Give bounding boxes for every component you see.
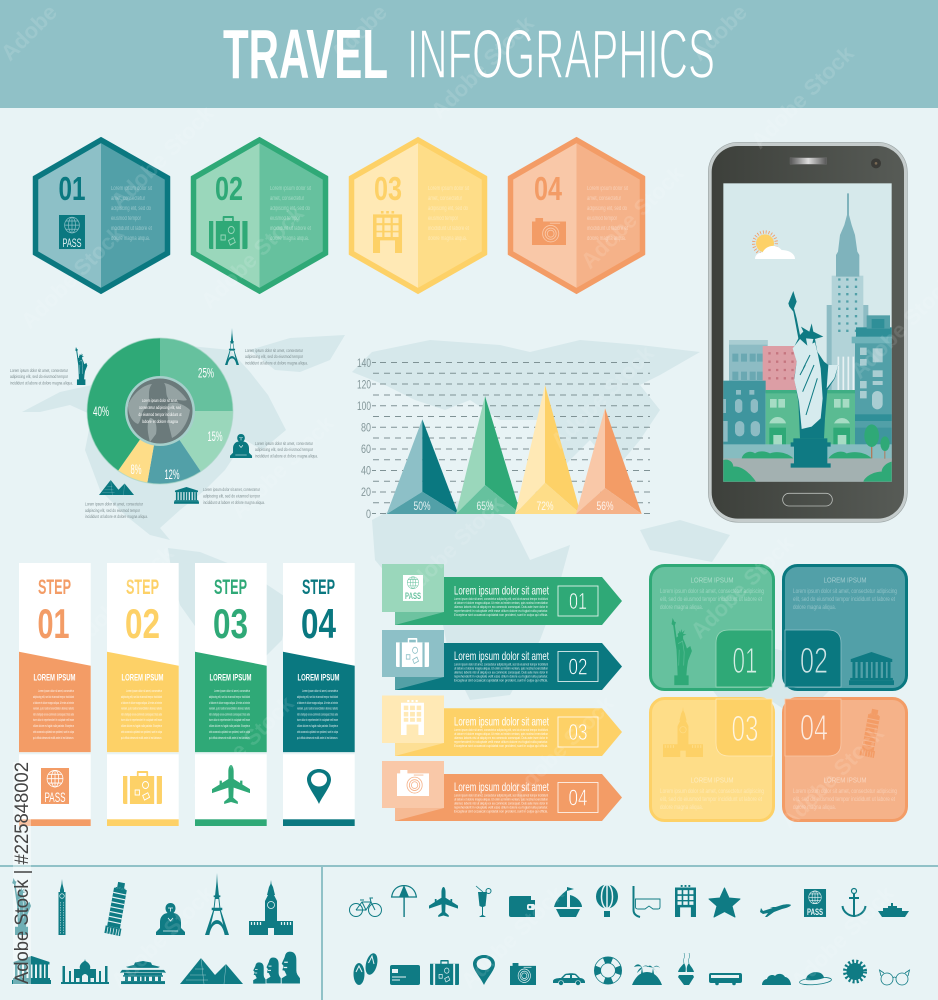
panel: hexagon 03: Lorem ipsum dolor sit <box>428 186 469 192</box>
panel: rounded square 04: LOREM IPSUM <box>824 776 866 784</box>
panel: rounded square 04: 04 <box>800 707 828 748</box>
panel: hexagon 04: amet, consectetur <box>587 196 621 202</box>
icon: bus <box>709 973 742 985</box>
watermark pattern: Adobe <box>686 0 752 66</box>
panel: hexagon 04: incididunt ut labore et <box>587 226 628 232</box>
panel: hexagon 01: Lorem ipsum dolor sit <box>111 186 152 192</box>
callout: pyramids: incididunt ut labore et dolore magna aliqua. <box>85 514 148 519</box>
panel: step 03: irure dolor in reprehenderit in voluptate velit esse <box>209 718 250 722</box>
panel: step 01: adipiscing elit, sed do eiusmod tempor incididunt <box>33 695 74 699</box>
panel: rounded square 01: dolore magna aliqua. <box>660 604 703 611</box>
callout: buddha: incididunt ut labore et dolore magna aliqua. <box>255 454 318 458</box>
panel: hexagon 01 <box>33 137 170 294</box>
icon: credit card <box>390 965 420 985</box>
panel: step 01: ut labore et dolore magna aliqua. Ut enim ad minim <box>33 701 74 705</box>
panel: hexagon 04: adipiscing elit, sed do <box>587 206 627 212</box>
icon: wallet <box>509 896 535 917</box>
axis labels: 60 <box>361 443 371 456</box>
panel: step 02: sint occaecat cupidatat non proident, sunt in culpa <box>121 730 162 734</box>
title light word: INFOGRAPHICS <box>407 15 715 93</box>
panel: arrow banner 01: Lorem ipsum dolor sit amet, consectetur adipiscing elit, sed do eiusmod tempor incididunt <box>454 597 548 601</box>
panel: arrow banner 03: Excepteur sint occaecat cupidatat non proident, sunt in culpa qui officia. <box>454 744 548 748</box>
panel: arrow banner 03: reprehenderit in voluptate velit esse cillum dolore eu fugiat nulla pariatur. <box>454 740 548 744</box>
panel: step 04: veniam, quis nostrud exercitation ullamco laboris <box>297 706 338 710</box>
panel: rounded square 03: elit, sed do eiusmod tempor incididunt ut labore et <box>660 796 762 803</box>
panel: step 01: Lorem ipsum dolor sit amet, consectetur <box>38 689 75 693</box>
panel: arrow banner 02 <box>382 630 622 690</box>
panel: rounded square 03: Lorem ipsum dolor sit amet, consectetur adipiscing <box>660 788 764 795</box>
sun and cloud <box>754 232 795 259</box>
axis labels: 80 <box>361 422 371 434</box>
globe: do eiusmod tempor incididunt ut <box>138 412 182 417</box>
panel: rounded square 03: 03 <box>732 708 758 749</box>
panel: step 01: LOREM IPSUM <box>34 672 76 684</box>
panel: arrow banner 04: ullamco laboris nisi ut aliquip ex ea commodo consequat. Duis aute irure dolor in <box>454 802 548 806</box>
watermark pattern: Adobe Stock <box>196 200 309 314</box>
phone screen illustration <box>723 183 892 482</box>
panel: step 04: ut labore et dolore magna aliqua. Ut enim ad minim <box>297 701 338 705</box>
panel: hexagon 02: incididunt ut labore et <box>270 226 311 232</box>
icon: bikini <box>678 953 694 985</box>
watermark pattern: Adobe Stock <box>426 10 539 124</box>
panel: hexagon 03: adipiscing elit, sed do <box>428 206 468 212</box>
panel: step 03: adipiscing elit, sed do eiusmod tempor incididunt <box>209 695 250 699</box>
world map <box>22 335 830 720</box>
chart: triangles <box>357 357 650 521</box>
watermark pattern: Adobe Stock <box>186 690 299 804</box>
watermark pattern: Adobe Stock <box>396 490 509 604</box>
panel: step 01: nisi ut aliquip ex ea commodo consequat. Duis aute <box>33 712 74 716</box>
icon: anchor <box>842 888 866 917</box>
panel: step 02: irure dolor in reprehenderit in voluptate velit esse <box>121 718 162 722</box>
callout: statue of liberty: incididunt ut labore et dolore magna aliqua. <box>10 380 73 386</box>
icon: bicycle <box>350 898 382 916</box>
panel: step 02: veniam, quis nostrud exercitation ullamco laboris <box>121 706 162 710</box>
panel: hexagon 02: dolore magna aliqua. <box>270 236 309 242</box>
globe: consectetur adipiscing elit, sed <box>139 405 181 410</box>
panel: step 04: irure dolor in reprehenderit in voluptate velit esse <box>297 718 338 722</box>
panel: step 04 <box>283 563 355 826</box>
icon: cloud <box>762 974 791 985</box>
panel: arrow banner 03: Lorem ipsum dolor sit amet <box>454 716 550 728</box>
title: TRAVEL <box>223 15 388 93</box>
panel: arrow banner 01: Excepteur sint occaecat cupidatat non proident, sunt in culpa qui officia. <box>454 613 548 617</box>
callout: eiffel tower <box>225 328 308 366</box>
panel: step 04: cillum dolore eu fugiat nulla pariatur. Excepteur <box>297 724 339 728</box>
panel: arrow banner 03: Lorem ipsum dolor sit amet, consectetur adipiscing elit, sed do eiusmod tempor incididunt <box>454 728 548 732</box>
panel: rounded square 01: LOREM IPSUM <box>690 576 734 584</box>
panel: arrow banner 02: Lorem ipsum dolor sit amet, consectetur adipiscing elit, sed do eiusmod tempor incididunt <box>454 662 548 666</box>
panel: step 03: qui officia deserunt mollit anim id est laborum. <box>209 736 250 740</box>
icon: starfish <box>709 888 740 917</box>
panel: step 03 <box>195 563 267 826</box>
panel: rounded square 03: LOREM IPSUM <box>690 776 734 784</box>
icon text: pass: PASS <box>807 907 823 917</box>
triangle 65% <box>456 396 521 514</box>
axis labels: 0 <box>366 508 371 521</box>
panel: step 04: adipiscing elit, sed do eiusmod tempor incididunt <box>297 695 338 699</box>
donut chart <box>87 338 233 484</box>
panel: rounded square 04 <box>784 698 906 820</box>
panel: arrow banner 02: reprehenderit in voluptate velit esse cillum dolore eu fugiat nulla pariatur. <box>454 674 548 678</box>
axis labels: 20 <box>361 486 371 499</box>
panel: hexagon 03: amet, consectetur <box>428 196 462 202</box>
panel: hexagon 03: dolore magna aliqua. <box>428 236 467 242</box>
icon: cocktail <box>476 886 491 917</box>
axis labels: 40 <box>361 464 371 478</box>
callout: pyramids: adipiscing elit, sed do eiusmod tempor <box>85 508 140 513</box>
watermark pattern: Adobe Stock <box>106 100 219 214</box>
icon: beach umbrella <box>392 885 416 917</box>
icon: snorkel <box>634 886 660 917</box>
phone <box>708 142 907 522</box>
watermark pattern: Adobe Stock <box>776 720 889 834</box>
panel: arrow banner 03 <box>382 696 622 756</box>
panel: step 04: Lorem ipsum dolor sit amet, consectetur <box>302 689 339 693</box>
panel: hexagon 02: amet, consectetur <box>270 196 304 202</box>
panel: hexagon 02: eiusmod tempor <box>270 216 300 222</box>
panel: step 02: Lorem ipsum dolor sit amet, consectetur <box>126 689 163 693</box>
panel: hexagon 04: eiusmod tempor <box>587 216 617 222</box>
panel: hexagon 01: 01 <box>58 170 86 207</box>
panel: hexagon 04: 04 <box>534 170 562 207</box>
panel: hexagon 04: Lorem ipsum dolor sit <box>587 186 628 192</box>
donut chart: 12% <box>164 467 180 482</box>
icon: sun <box>845 962 865 982</box>
panel: hexagon 01: amet, consectetur <box>111 196 145 202</box>
panel: rounded square 03: dolore magna aliqua. <box>660 804 703 811</box>
panel: arrow banner 04: ut labore et dolore magna aliqua. Ut enim ad minim veniam, quis nostrud exercitation <box>454 798 548 802</box>
globe: labore et dolore magna <box>142 419 178 424</box>
icon: life buoy <box>595 957 621 984</box>
watermark pattern: Adobe Stock <box>786 880 899 994</box>
watermark pattern: Adobe Stock <box>16 220 129 334</box>
panel: step 02: STEP <box>126 575 159 599</box>
donut chart: 25% <box>198 366 214 380</box>
panel: rounded square 02: 02 <box>800 640 828 681</box>
panel: rounded square 02: dolore magna aliqua. <box>793 604 836 611</box>
watermark pattern: Adobe Stock <box>106 880 219 994</box>
panel: arrow banner 02: Lorem ipsum dolor sit amet <box>454 650 550 663</box>
panel: rounded square 02: Lorem ipsum dolor sit amet, consectetur adipiscing <box>793 588 897 595</box>
panel: rounded square 02: elit, sed do eiusmod tempor incididunt ut labore et <box>793 596 895 603</box>
panel: step 01: sint occaecat cupidatat non proident, sunt in culpa <box>33 730 74 734</box>
panel: step 01: qui officia deserunt mollit anim id est laborum. <box>33 736 74 740</box>
panel: step 02: nisi ut aliquip ex ea commodo consequat. Duis aute <box>121 712 162 716</box>
panel: step 02: cillum dolore eu fugiat nulla pariatur. Excepteur <box>121 724 163 728</box>
statue of liberty <box>788 291 838 468</box>
icon: island <box>632 964 662 985</box>
panel: step 01: 01 <box>38 600 70 647</box>
panel: step 04: sint occaecat cupidatat non proident, sunt in culpa <box>297 730 338 734</box>
donut chart: 8% <box>130 462 142 477</box>
panel: hexagon 01: PASS <box>62 236 82 250</box>
icon: sunglasses <box>880 970 910 985</box>
panel: step 01: irure dolor in reprehenderit in voluptate velit esse <box>33 718 74 722</box>
watermark pattern: Adobe Stock <box>546 340 659 454</box>
panel: step 03: STEP <box>214 575 247 599</box>
panel: step 02 <box>107 563 179 826</box>
callout: buddha: adipiscing elit, sed do eiusmod tempor <box>255 447 313 452</box>
panel: step 04: qui officia deserunt mollit anim id est laborum. <box>297 736 338 740</box>
watermark pattern: Adobe Stock <box>576 160 689 274</box>
panel: step 02: LOREM IPSUM <box>122 672 164 684</box>
panel: step 04: 04 <box>301 600 336 647</box>
icon: ship <box>878 903 909 917</box>
watermark pattern: Adobe <box>326 0 392 66</box>
panel: arrow banner 01: ullamco laboris nisi ut aliquip ex ea commodo consequat. Duis aute irure dolor in <box>454 605 548 609</box>
callout: eiffel tower: incididunt ut labore et dolore magna aliqua. <box>245 360 308 366</box>
panel: arrow banner 01: reprehenderit in voluptate velit esse cillum dolore eu fugiat nulla pariatur. <box>454 609 548 613</box>
panel: hexagon 02: 02 <box>215 170 243 207</box>
ground and road <box>723 444 892 482</box>
panel: arrow banner 02: ut labore et dolore magna aliqua. Ut enim ad minim veniam, quis nostrud exercitation <box>454 666 548 670</box>
callout: eiffel tower: adipiscing elit, sed do eiusmod tempor <box>245 354 303 359</box>
panel: rounded square 01 <box>650 566 774 690</box>
icon: sun hat <box>799 972 832 986</box>
panel: arrow banner 04: Excepteur sint occaecat cupidatat non proident, sunt in culpa qui officia. <box>454 810 548 814</box>
icon: sailboat <box>554 887 582 917</box>
callout: buddha <box>230 434 318 458</box>
icon set: travel row 1 <box>350 884 909 917</box>
panel: step 03: cillum dolore eu fugiat nulla pariatur. Excepteur <box>209 724 251 728</box>
panel: hexagon 02: Lorem ipsum dolor sit <box>270 186 311 192</box>
panel: step 03: nisi ut aliquip ex ea commodo consequat. Duis aute <box>209 712 250 716</box>
callout: eiffel tower: Lorem ipsum dolor sit amet, consectetur <box>245 348 303 353</box>
panel: hexagon 01: adipiscing elit, sed do <box>111 206 151 212</box>
panel: hexagon 04: dolore magna aliqua. <box>587 236 626 242</box>
watermark pattern: Adobe Stock <box>746 40 859 154</box>
donut chart: 40% <box>93 404 109 419</box>
callout: pyramids <box>85 480 148 519</box>
panel: step 01: PASS <box>44 790 66 805</box>
panel: hexagon 01: dolore magna aliqua. <box>111 236 150 242</box>
triangle 65%: 65% <box>476 501 494 513</box>
panel: rounded square 03 <box>650 698 774 820</box>
triangle 50% <box>387 419 458 514</box>
panel: step 04: LOREM IPSUM <box>298 672 340 684</box>
callout: buddha: Lorem ipsum dolor sit amet, consectetur <box>255 441 313 446</box>
panel: rounded square 04: Lorem ipsum dolor sit amet, consectetur adipiscing <box>793 788 897 795</box>
panel: step 01: cillum dolore eu fugiat nulla pariatur. Excepteur <box>33 724 75 728</box>
axis labels: 140 <box>357 357 371 370</box>
watermark pattern: Adobe Stock <box>686 530 799 644</box>
left buildings <box>723 340 800 445</box>
icon: flip flops <box>354 952 379 985</box>
panel: step 03: 03 <box>213 600 248 647</box>
panel: hexagon 03: incididunt ut labore et <box>428 226 469 232</box>
panel: arrow banner 03: ut labore et dolore magna aliqua. Ut enim ad minim veniam, quis nostrud exercitation <box>454 732 548 736</box>
triangle 72%: 72% <box>536 501 554 513</box>
panel: hexagon 04 <box>508 137 645 294</box>
panel: hexagon 02: adipiscing elit, sed do <box>270 206 310 212</box>
triangle 56%: 56% <box>596 501 614 513</box>
axis labels: 120 <box>357 378 371 392</box>
icon set: landmarks <box>12 873 300 984</box>
panel: arrow banner 01: Lorem ipsum dolor sit amet <box>454 584 550 598</box>
header band <box>0 0 938 108</box>
callout: statue of liberty: adipiscing elit, sed do eiusmod tempor <box>10 374 68 379</box>
panel: rounded square 04: elit, sed do eiusmod tempor incididunt ut labore et <box>793 796 895 803</box>
triangle 56% <box>576 408 642 514</box>
panel: rounded square 01: Lorem ipsum dolor sit amet, consectetur adipiscing <box>660 588 764 595</box>
panel: hexagon 03 <box>349 137 487 294</box>
panel: step 02: adipiscing elit, sed do eiusmod tempor incididunt <box>121 695 162 699</box>
icon: airliner <box>760 904 791 917</box>
panel: arrow banner 02: Excepteur sint occaecat cupidatat non proident, sunt in culpa qui officia. <box>454 678 548 682</box>
panel: arrow banner 03: 03 <box>568 719 588 745</box>
panel: hexagon 03: 03 <box>374 170 402 207</box>
panel: step 01: STEP <box>38 575 71 599</box>
panel: step 02: 02 <box>125 600 160 647</box>
panel: arrow banner 01: PASS <box>405 591 421 601</box>
panel: hexagon 03: eiusmod tempor <box>428 216 458 222</box>
panel: arrow banner 02: 02 <box>568 654 588 680</box>
icon: hot air balloon <box>596 884 618 917</box>
trees <box>864 424 890 459</box>
callout: pyramids: Lorem ipsum dolor sit amet, consectetur <box>85 502 143 506</box>
panel: rounded square 04: dolore magna aliqua. <box>793 804 836 811</box>
panel: hexagon 02 <box>191 137 328 294</box>
right building <box>852 315 892 445</box>
panel: arrow banner 04: Lorem ipsum dolor sit amet, consectetur adipiscing elit, sed do eiusmod tempor incididunt <box>454 794 548 798</box>
panel: arrow banner 01: 01 <box>569 588 587 614</box>
panel: step 02: qui officia deserunt mollit anim id est laborum. <box>121 736 162 740</box>
panel: rounded square 02 <box>784 566 906 690</box>
panel: arrow banner 02: ullamco laboris nisi ut aliquip ex ea commodo consequat. Duis aute irure dolor in <box>454 670 548 674</box>
triangle 50%: 50% <box>414 501 430 513</box>
green buildings <box>766 390 855 445</box>
panel: step 03: sint occaecat cupidatat non proident, sunt in culpa <box>209 730 250 734</box>
panel: step 04: nisi ut aliquip ex ea commodo consequat. Duis aute <box>297 712 338 716</box>
panel: step 01: veniam, quis nostrud exercitation ullamco laboris <box>33 706 74 710</box>
globe <box>125 376 195 446</box>
panel: step 03: ut labore et dolore magna aliqua. Ut enim ad minim <box>209 701 250 705</box>
icon set: travel row 2 <box>354 952 910 986</box>
panel: arrow banner 01: ut labore et dolore magna aliqua. Ut enim ad minim veniam, quis nostrud exercitation <box>454 601 548 605</box>
panel: arrow banner 04 <box>382 761 622 821</box>
donut chart: 15% <box>208 429 222 444</box>
panel: arrow banner 03: ullamco laboris nisi ut aliquip ex ea commodo consequat. Duis aute irure dolor in <box>454 736 548 740</box>
panel: arrow banner 04: 04 <box>568 784 588 810</box>
callout: parthenon <box>174 487 265 505</box>
panel: step 03: veniam, quis nostrud exercitation ullamco laboris <box>209 706 250 710</box>
panel: hexagon 01: eiusmod tempor <box>111 216 141 222</box>
panel: step 03: Lorem ipsum dolor sit amet, consectetur <box>214 689 251 693</box>
panel: rounded square 01: elit, sed do eiusmod tempor incididunt ut labore et <box>660 596 762 603</box>
icon: car <box>553 973 585 986</box>
skyscraper <box>827 193 868 392</box>
panel: arrow banner 01 <box>382 564 622 625</box>
callout: parthenon: Lorem ipsum dolor sit amet, consectetur <box>203 487 260 492</box>
callout: parthenon: adipiscing elit, sed do eiusmod tempor <box>203 494 260 498</box>
watermark pattern: Adobe Stock <box>226 410 339 524</box>
panel: arrow banner 04: reprehenderit in voluptate velit esse cillum dolore eu fugiat nulla pariatur. <box>454 806 548 810</box>
panel: rounded square 01: 01 <box>732 640 758 681</box>
triangle 72% <box>515 385 581 514</box>
panel: rounded square 02: LOREM IPSUM <box>824 576 866 584</box>
vertical stock credit: Adobe Stock | #225848002 <box>12 762 33 984</box>
callout: statue of liberty <box>10 347 87 386</box>
panel: hexagon 01: incididunt ut labore et <box>111 226 152 232</box>
globe: Lorem ipsum dolor sit amet, <box>142 398 178 403</box>
axis labels <box>357 357 371 521</box>
panel: step 03: LOREM IPSUM <box>210 672 252 684</box>
watermark pattern: Adobe Stock <box>456 880 569 994</box>
callout: parthenon: incididunt ut labore et dolore magna aliqua. <box>203 500 265 505</box>
panel: step 02: ut labore et dolore magna aliqua. Ut enim ad minim <box>121 701 162 705</box>
watermark pattern: Adobe Stock <box>506 690 619 804</box>
panel: step 01 <box>19 563 91 826</box>
callout: statue of liberty: Lorem ipsum dolor sit amet, consectetur <box>10 368 68 373</box>
panel: step 04: STEP <box>302 575 335 599</box>
panel: arrow banner 04: Lorem ipsum dolor sit amet <box>454 781 550 794</box>
axis labels: 100 <box>357 400 371 413</box>
watermark pattern: Adobe Stock <box>66 540 179 654</box>
